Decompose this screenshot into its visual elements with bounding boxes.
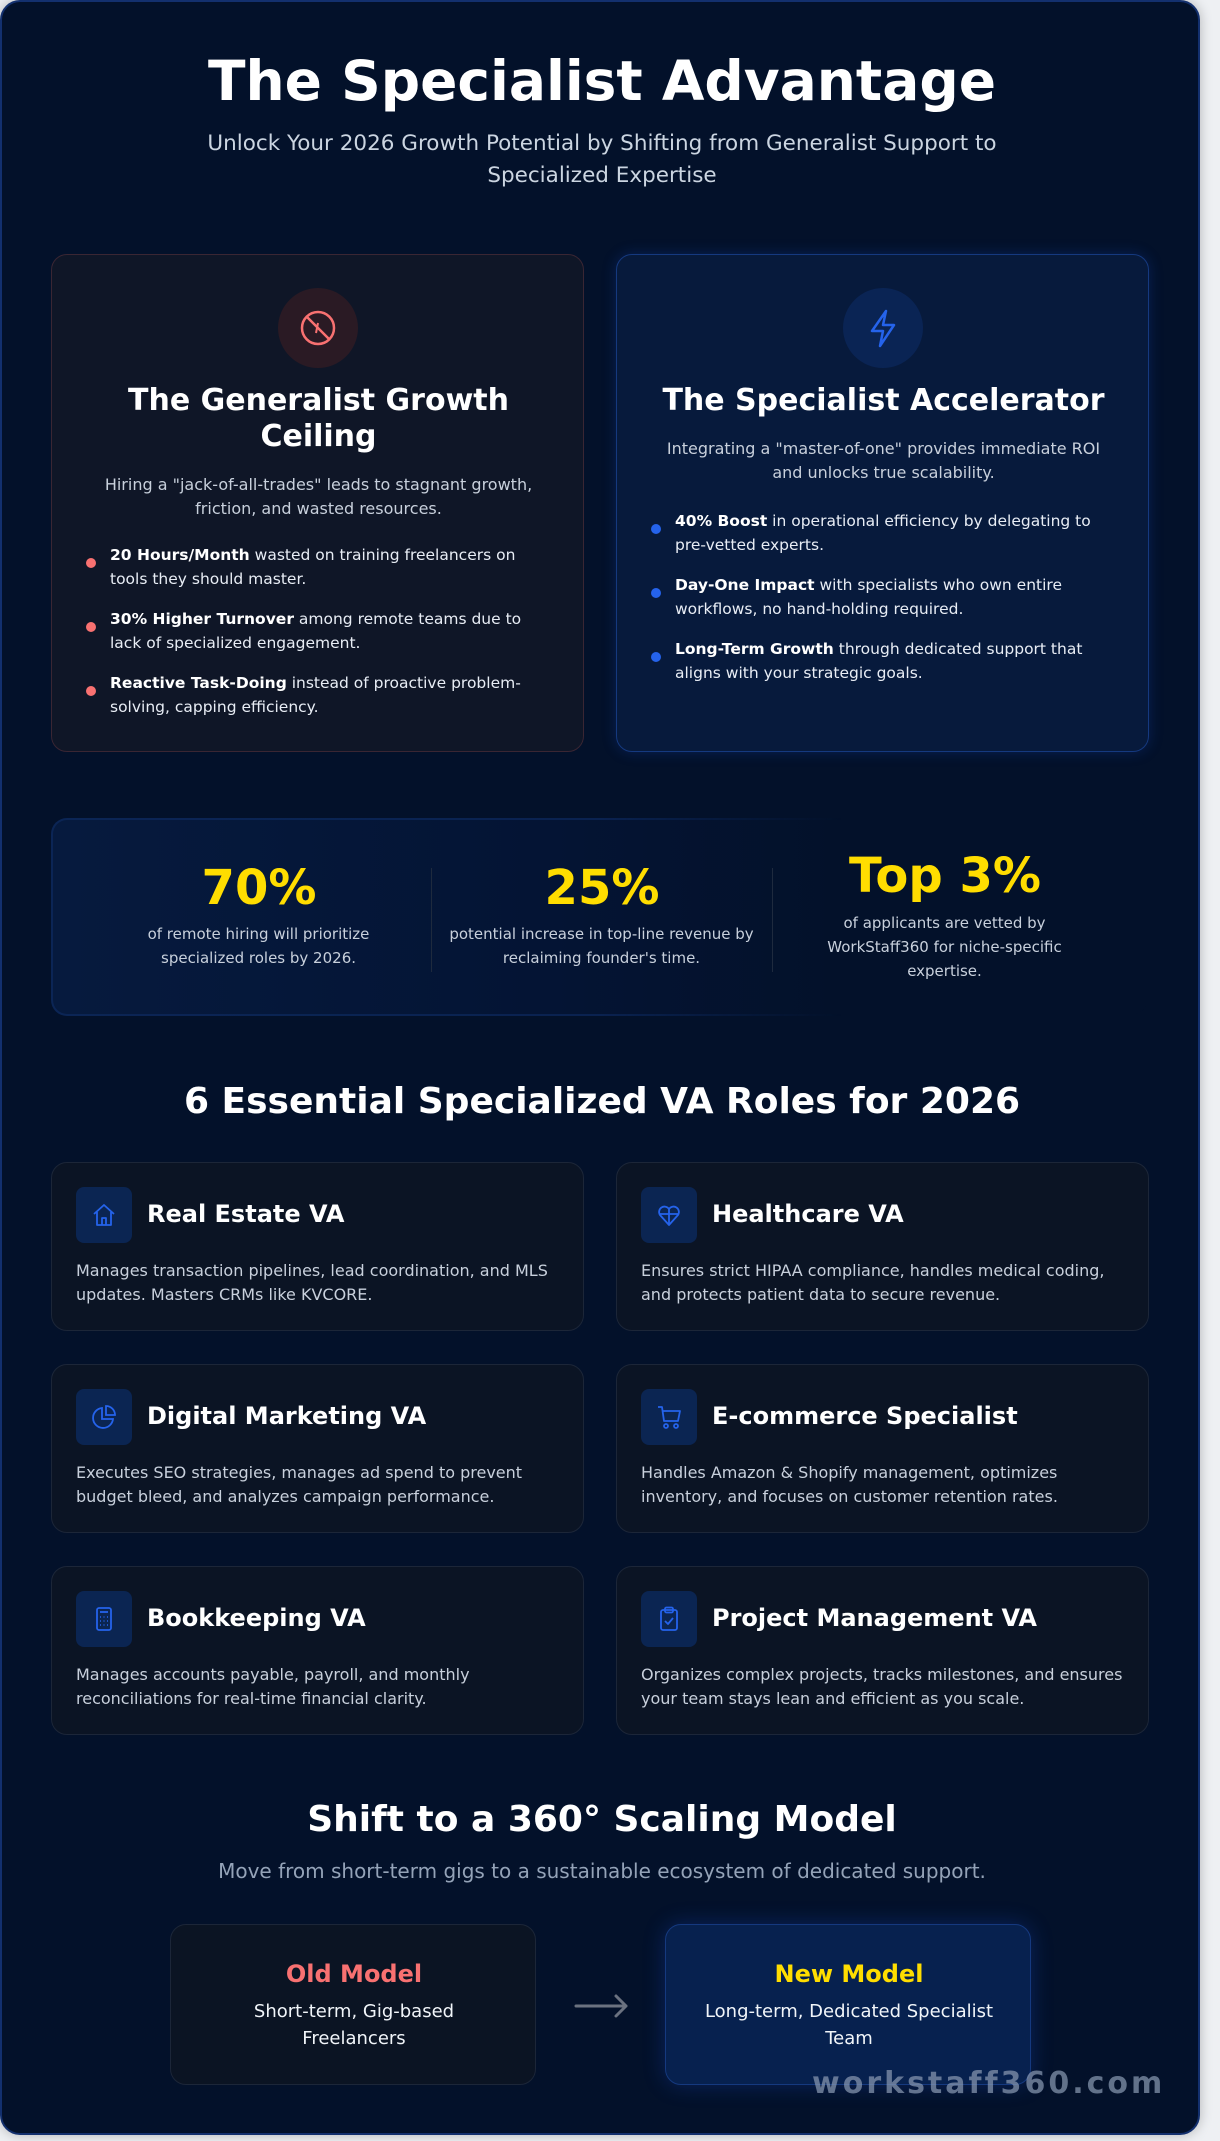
section heading: scaling model: Shift to a 360° Scaling Model bbox=[307, 1799, 897, 1840]
arrow bbox=[574, 1994, 628, 2018]
icon: heart bbox=[641, 1187, 697, 1243]
icon: cart bbox=[641, 1389, 697, 1445]
stat: 25%: 25% bbox=[545, 860, 659, 916]
text: Integrating a "master-of-one" provides immediate ROI and unlocks true scalability. bbox=[667, 439, 1100, 482]
box: new model: New Model bbox=[775, 1960, 923, 1988]
role: ecommerce: E-commerce Specialist bbox=[712, 1402, 1018, 1430]
watermark: workstaff360.com bbox=[812, 2066, 1165, 2101]
panel: specialist bbox=[616, 254, 1149, 752]
icon: no-sign bbox=[278, 288, 358, 368]
bullet list: 30% Higher Turnover among remote teams due to lack of specialized engagement. bbox=[110, 610, 521, 652]
role: bookkeeping: Bookkeeping VA bbox=[147, 1604, 366, 1632]
box: new model bbox=[665, 1924, 1031, 2085]
bullet list: Long-Term Growth through dedicated support that aligns with your strategic goals. bbox=[675, 640, 1082, 682]
title: The Specialist Advantage bbox=[208, 49, 996, 113]
role: real estate bbox=[51, 1162, 584, 1331]
bullet list: 20 Hours/Month wasted on training freelancers on tools they should master. bbox=[110, 546, 515, 588]
icon: lightning bbox=[843, 288, 923, 368]
role: real estate: Real Estate VA bbox=[147, 1200, 345, 1228]
section heading: roles: 6 Essential Specialized VA Roles for 2026 bbox=[184, 1081, 1020, 1122]
box: new model: Long-term, Dedicated Specialist Team bbox=[705, 2001, 993, 2049]
role: project management: Project Management VA bbox=[712, 1604, 1037, 1632]
role: ecommerce: Handles Amazon & Shopify management, optimizes inventory, and focuses on customer retention rates. bbox=[641, 1463, 1058, 1506]
box: old model: Old Model bbox=[286, 1960, 422, 1988]
stat: 25%: potential increase in top-line revenue by reclaiming founder's time. bbox=[449, 925, 754, 967]
role: healthcare bbox=[616, 1162, 1149, 1331]
heading: The Specialist Accelerator bbox=[662, 383, 1105, 418]
role: ecommerce bbox=[616, 1364, 1149, 1533]
panel: stats bbox=[51, 818, 1149, 1016]
role: real estate: Manages transaction pipelines, lead coordination, and MLS updates. Masters CRMs like KVCORE. bbox=[76, 1261, 548, 1304]
bullet list bbox=[651, 512, 1091, 682]
stat: 25% bbox=[449, 860, 754, 967]
role: digital marketing bbox=[51, 1364, 584, 1533]
panel: generalist bbox=[51, 254, 584, 752]
bullet list bbox=[86, 546, 521, 716]
stat: 70%: 70% bbox=[202, 860, 316, 916]
bullet list: 40% Boost in operational efficiency by delegating to pre-vetted experts. bbox=[675, 512, 1091, 554]
subheading: Move from short-term gigs to a sustainable ecosystem of dedicated support. bbox=[218, 1859, 986, 1883]
text: Hiring a "jack-of-all-trades" leads to stagnant growth, friction, and wasted resources. bbox=[105, 475, 532, 518]
stat: top 3%: Top 3% bbox=[849, 848, 1041, 904]
heading: The Generalist Growth Ceiling bbox=[128, 383, 509, 454]
subtitle: Unlock Your 2026 Growth Potential by Shifting from Generalist Support to Specialized Expertise bbox=[207, 131, 997, 188]
stat: 70% bbox=[148, 860, 369, 967]
stat: top 3%: of applicants are vetted by WorkStaff360 for niche-specific expertise. bbox=[827, 914, 1062, 980]
box: old model bbox=[170, 1924, 536, 2085]
bullet list: Day-One Impact with specialists who own entire workflows, no hand-holding required. bbox=[675, 576, 1062, 618]
role: digital marketing: Digital Marketing VA bbox=[147, 1402, 426, 1430]
role: project management: Organizes complex projects, tracks milestones, and ensures your team stays lean and efficient as you scale. bbox=[641, 1665, 1122, 1708]
role: bookkeeping bbox=[51, 1566, 584, 1735]
icon: pie chart bbox=[76, 1389, 132, 1445]
role: healthcare: Healthcare VA bbox=[712, 1200, 904, 1228]
icon: clipboard bbox=[641, 1591, 697, 1647]
role: healthcare: Ensures strict HIPAA compliance, handles medical coding, and protects patient data to secure revenue. bbox=[641, 1261, 1104, 1304]
role: digital marketing: Executes SEO strategies, manages ad spend to prevent budget bleed, and analyzes campaign performance. bbox=[76, 1463, 522, 1506]
bullet list: Reactive Task-Doing instead of proactive problem-solving, capping efficiency. bbox=[110, 674, 521, 716]
role: project management bbox=[616, 1566, 1149, 1735]
icon: house bbox=[76, 1187, 132, 1243]
stat: 70%: of remote hiring will prioritize specialized roles by 2026. bbox=[148, 925, 369, 967]
role: bookkeeping: Manages accounts payable, payroll, and monthly reconciliations for real-time financial clarity. bbox=[76, 1665, 470, 1708]
box: old model: Short-term, Gig-based Freelancers bbox=[254, 2001, 454, 2049]
stat: top 3% bbox=[827, 848, 1062, 980]
icon: calculator bbox=[76, 1591, 132, 1647]
